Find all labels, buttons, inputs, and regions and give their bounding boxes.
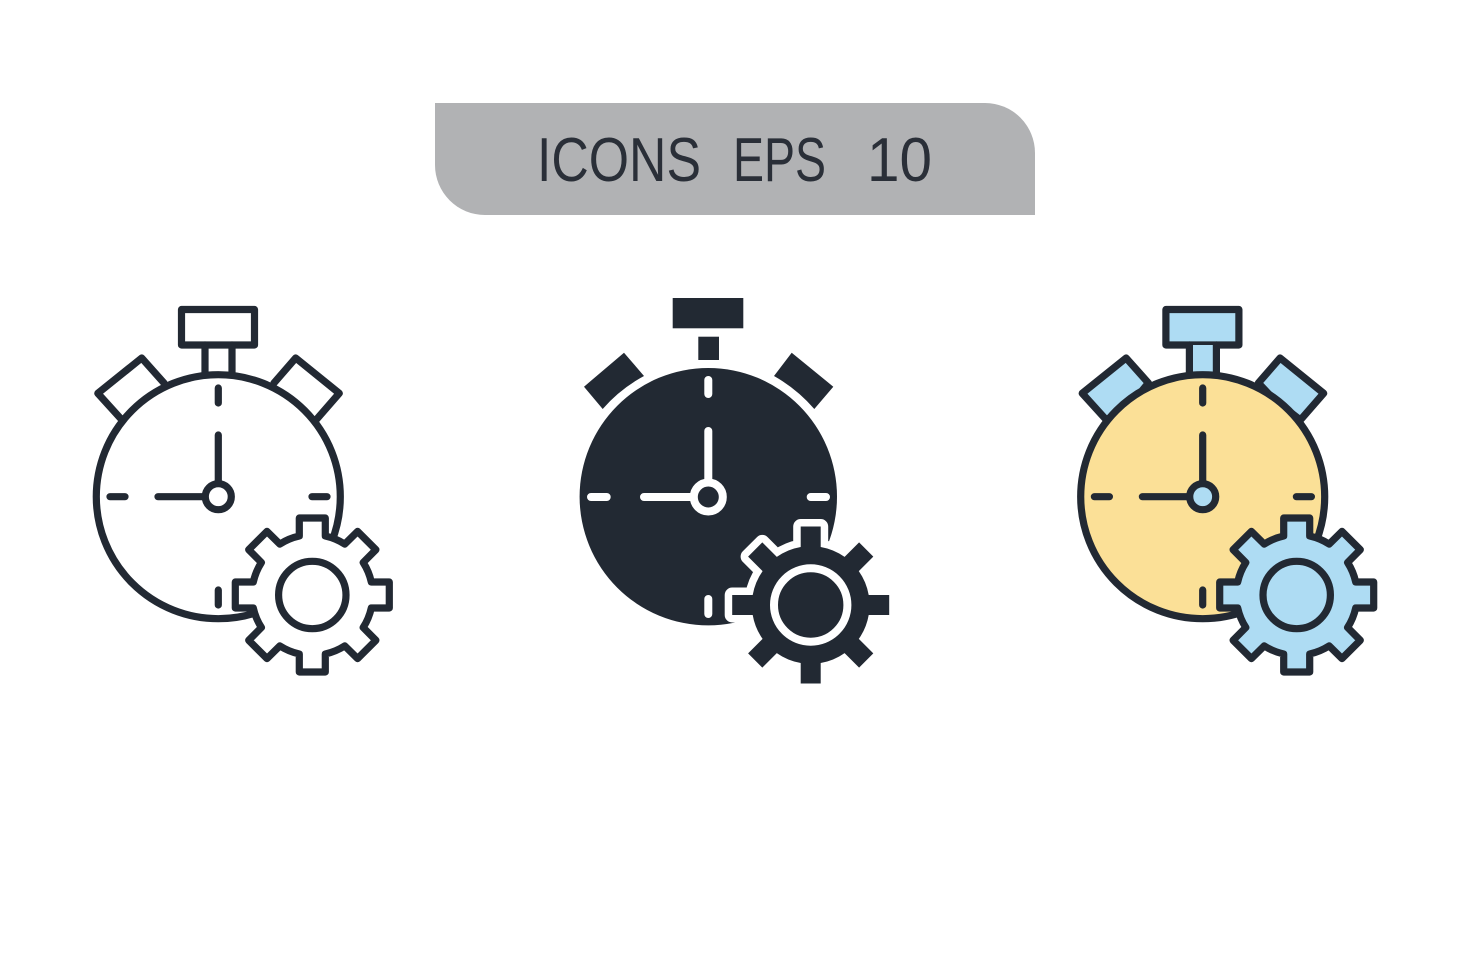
- icon: solid stopwatch with gear: [580, 298, 889, 684]
- colour crown button: [1166, 310, 1239, 345]
- solid crown stem: [698, 337, 719, 360]
- solid tick marks: [591, 380, 826, 614]
- colour left ear: [1082, 358, 1148, 420]
- outline crown stem: [205, 345, 232, 374]
- outline gear: [235, 518, 389, 672]
- colour gear: [1220, 518, 1374, 672]
- solid clock hands: [644, 431, 708, 497]
- banner title: EPS: [733, 126, 826, 195]
- colour right ear: [1258, 358, 1324, 420]
- banner title: ICONS: [537, 126, 701, 195]
- solid crown button: [673, 298, 743, 328]
- outline right ear: [274, 358, 339, 420]
- icon: outline stopwatch with gear: [96, 310, 389, 672]
- solid clock pivot: [694, 482, 723, 512]
- icon: coloured stopwatch with gear: [1081, 310, 1374, 672]
- outline clock face: [96, 375, 340, 619]
- outline crown button: [182, 310, 254, 345]
- colour clock pivot: [1190, 484, 1216, 510]
- colour tick marks: [1094, 388, 1311, 605]
- outline left ear: [98, 358, 164, 420]
- outline tick marks: [110, 388, 327, 605]
- solid right ear: [774, 353, 833, 409]
- banner title: [537, 126, 932, 195]
- outline clock hands: [158, 435, 218, 497]
- solid clock face: [580, 368, 837, 625]
- colour clock hands: [1142, 435, 1203, 497]
- banner background: [435, 103, 1035, 215]
- solid gear: [732, 526, 889, 684]
- colour crown stem: [1189, 345, 1216, 376]
- heading banner: [435, 103, 1035, 215]
- outline clock pivot: [205, 484, 231, 510]
- colour clock face: [1081, 375, 1325, 619]
- solid left ear: [584, 353, 644, 409]
- banner title: 10: [867, 126, 932, 195]
